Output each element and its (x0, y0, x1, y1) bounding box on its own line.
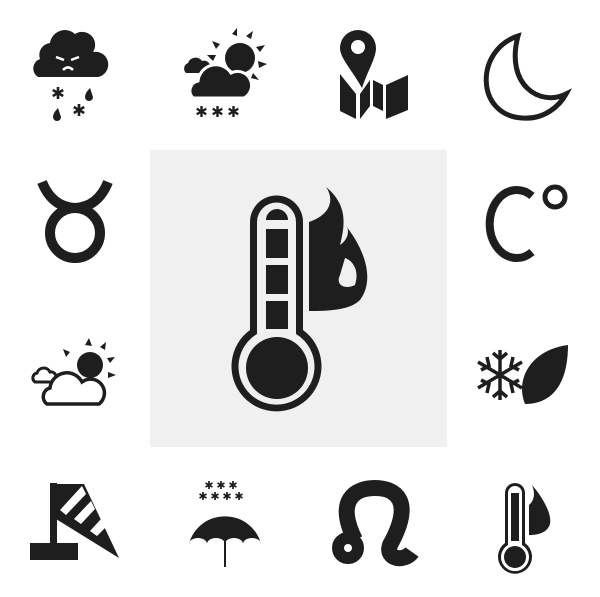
icon: sun cloud outline (33, 338, 116, 404)
icon: moon (486, 36, 566, 118)
icon: small thermometer with flame (498, 483, 550, 574)
icon: leo (336, 488, 412, 560)
icon: umbrella with snow (189, 481, 261, 567)
icon: windsock (30, 483, 119, 560)
icon: taurus (42, 182, 108, 258)
icon: sad cloud with snow and rain (33, 30, 108, 121)
icon: thermometer with flame (large) (232, 187, 367, 411)
icon: map pin (340, 30, 408, 119)
panel: center gray square (150, 150, 447, 447)
icon: snowflake and leaf (478, 345, 568, 404)
icon: celsius (490, 187, 565, 258)
icon: sun cloud snow (184, 28, 267, 117)
